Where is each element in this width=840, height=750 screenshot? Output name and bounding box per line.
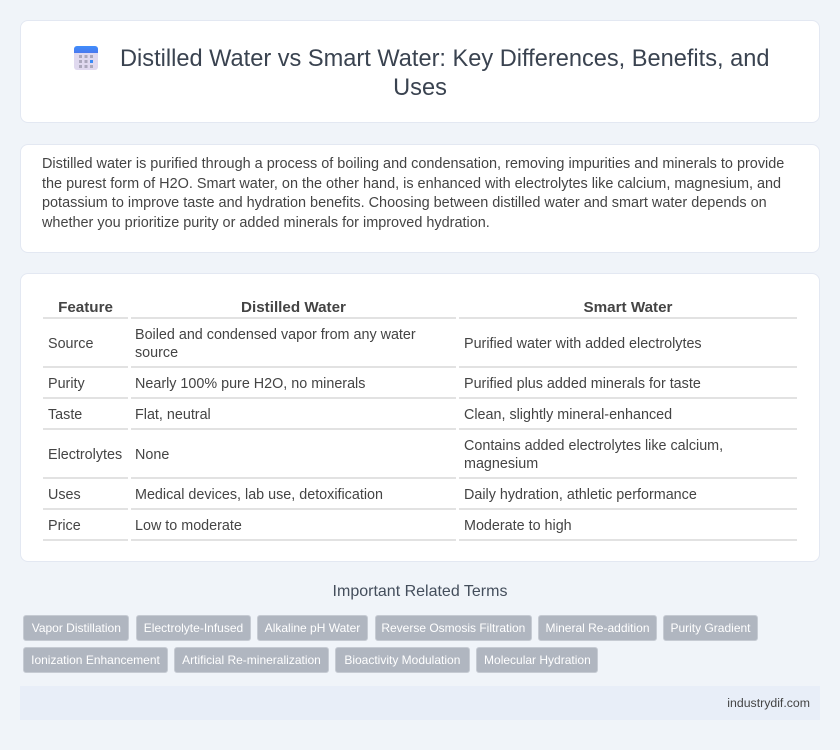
heading: important related terms: Important Related Terms bbox=[333, 583, 507, 600]
related term tags: Mineral Re-addition bbox=[545, 621, 650, 635]
comparison table: Electrolytes bbox=[48, 447, 122, 463]
comparison table: Feature bbox=[58, 299, 113, 316]
comparison table: Flat, neutral bbox=[135, 407, 211, 423]
related term tags: Ionization Enhancement bbox=[31, 653, 160, 667]
comparison table: Uses bbox=[48, 487, 81, 503]
comparison table: Smart Water bbox=[584, 299, 672, 316]
comparison table: Purified plus added minerals for taste bbox=[464, 376, 701, 392]
panel: title card bbox=[20, 20, 820, 123]
related term tags: Reverse Osmosis Filtration bbox=[381, 621, 525, 635]
comparison table: Daily hydration, athletic performance bbox=[464, 487, 697, 503]
related term tags: Alkaline pH Water bbox=[265, 621, 360, 635]
title: Uses bbox=[393, 75, 447, 101]
comparison table: Low to moderate bbox=[135, 518, 242, 534]
related term tags bbox=[23, 615, 758, 673]
title: Distilled Water vs Smart Water: Key Differences, Benefits, and bbox=[120, 46, 770, 72]
comparison table: Contains added electrolytes like calcium, bbox=[464, 438, 723, 454]
comparison table: Boiled and condensed vapor from any water bbox=[135, 327, 416, 343]
comparison table bbox=[43, 299, 797, 541]
comparison table: Distilled Water bbox=[241, 299, 346, 316]
related term tags: Electrolyte-Infused bbox=[144, 621, 243, 635]
comparison table: Nearly 100% pure H2O, no minerals bbox=[135, 376, 365, 392]
intro text bbox=[42, 156, 784, 230]
intro text: potassium to improve taste and hydration benefits. Choosing between distilled water and smart water depends on bbox=[42, 195, 767, 211]
related term tags: Vapor Distillation bbox=[32, 621, 121, 635]
comparison table: Medical devices, lab use, detoxification bbox=[135, 487, 383, 503]
related term tags: Molecular Hydration bbox=[484, 653, 591, 667]
related term tags: Artificial Re-mineralization bbox=[182, 653, 321, 667]
intro text: Distilled water is purified through a process of boiling and condensation, removing impurities and minerals to provide bbox=[42, 156, 784, 172]
intro text: the purest form of H2O. Smart water, on the other hand, is enhanced with electrolytes like calcium, magnesium, and bbox=[42, 176, 781, 192]
comparison table: Price bbox=[48, 518, 81, 534]
comparison table: magnesium bbox=[464, 456, 538, 472]
comparison table: Purified water with added electrolytes bbox=[464, 336, 702, 352]
related term tags: Bioactivity Modulation bbox=[344, 653, 460, 667]
comparison table: Source bbox=[48, 336, 93, 352]
intro text: whether you prioritize purity or added minerals for improved hydration. bbox=[42, 214, 490, 230]
comparison table: Moderate to high bbox=[464, 518, 572, 534]
related term tags: Purity Gradient bbox=[670, 621, 751, 635]
comparison table: Taste bbox=[48, 407, 82, 423]
icon: calendar grid bbox=[74, 46, 98, 70]
comparison table: Clean, slightly mineral-enhanced bbox=[464, 407, 672, 423]
panel: comparison table bbox=[20, 273, 820, 562]
footer bar bbox=[20, 686, 820, 720]
panel: introduction bbox=[20, 144, 820, 253]
footer source: industrydif.com bbox=[727, 696, 810, 710]
comparison table: source bbox=[135, 345, 178, 361]
comparison table: None bbox=[135, 447, 169, 463]
title bbox=[120, 46, 770, 101]
comparison table: Purity bbox=[48, 376, 85, 392]
